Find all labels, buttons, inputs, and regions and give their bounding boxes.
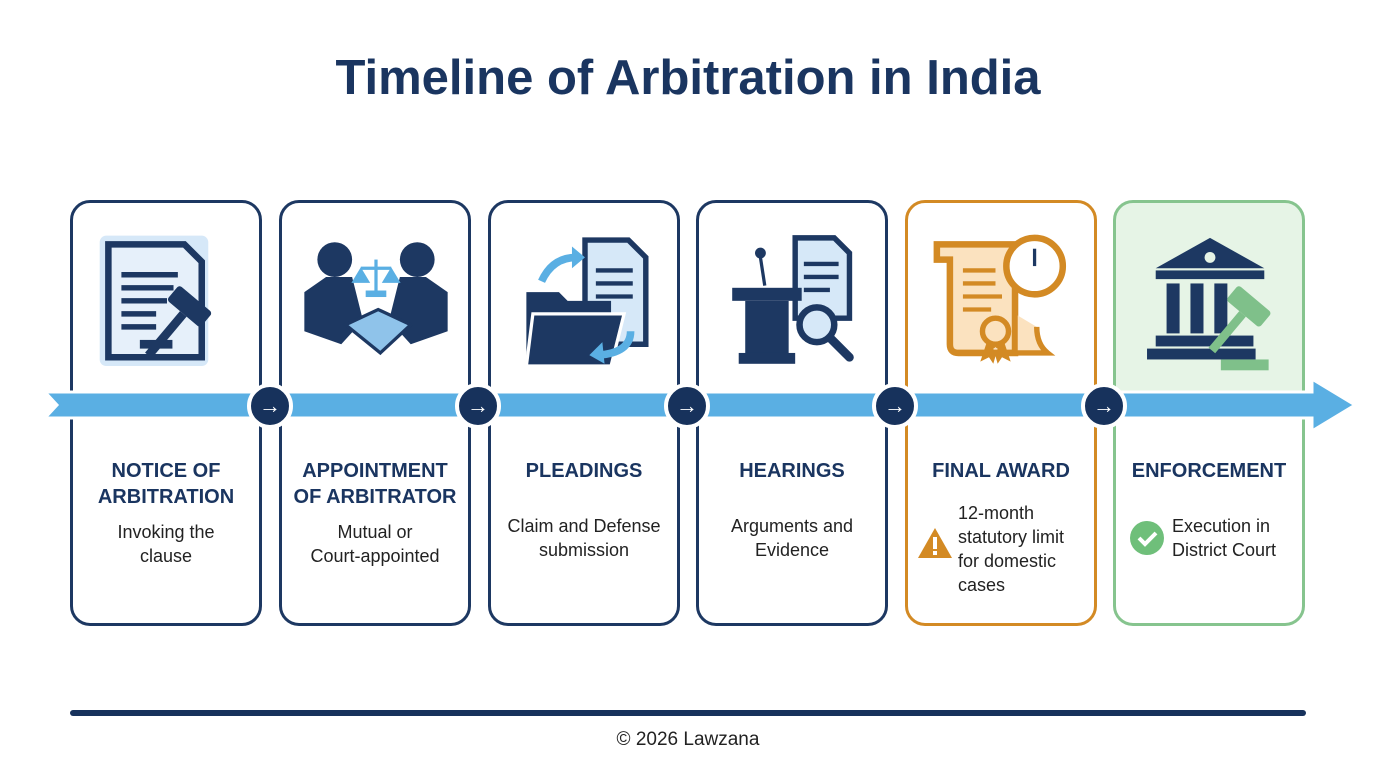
description: clause (140, 546, 192, 566)
description (507, 516, 661, 560)
description: Mutual or (337, 522, 413, 542)
description (958, 503, 1064, 595)
description: Invoking the (117, 522, 215, 542)
heading: NOTICE OF (112, 460, 220, 482)
timeline arrow (48, 382, 1352, 428)
title: Timeline of Arbitration in India (335, 51, 1041, 105)
description: for domestic (958, 551, 1056, 571)
icon: scroll, clock, ribbon (934, 234, 1066, 364)
heading: HEARINGS (739, 460, 845, 482)
heading: OF ARBITRATOR (294, 486, 456, 508)
description (117, 522, 215, 566)
description: Claim and Defense (507, 516, 661, 536)
description: District Court (1172, 540, 1276, 560)
heading: ENFORCEMENT (1132, 460, 1286, 482)
description: Court-appointed (310, 546, 440, 566)
icon: handshake with scales (304, 242, 448, 356)
icon: podium with magnifier (732, 235, 854, 364)
text: → (1093, 393, 1115, 418)
icon: document with gavel (100, 236, 212, 366)
card: notice of arbitration (70, 200, 262, 626)
description (310, 522, 440, 566)
heading: PLEADINGS (526, 460, 642, 482)
text: → (676, 393, 698, 418)
text: → (884, 393, 906, 418)
footer: © 2026 Lawzana (617, 729, 759, 750)
description: Execution in (1172, 516, 1270, 536)
description: cases (958, 575, 1005, 595)
heading (294, 460, 456, 508)
description (731, 516, 853, 560)
icon: courthouse with gavel (1147, 238, 1270, 370)
step arrows (247, 383, 293, 429)
text: → (467, 393, 489, 418)
description: statutory limit (958, 527, 1064, 547)
heading: ARBITRATION (98, 486, 234, 508)
step arrows: → (259, 393, 281, 418)
description (1172, 516, 1276, 560)
description: Arguments and (731, 516, 853, 536)
heading (98, 460, 234, 508)
card: appointment (279, 200, 471, 626)
card: pleadings (488, 200, 680, 626)
description: Evidence (755, 540, 829, 560)
footer rule (70, 710, 1306, 716)
card: hearings (696, 200, 888, 626)
description: 12-month (958, 503, 1034, 523)
icon: check (1130, 521, 1164, 555)
heading: APPOINTMENT (302, 460, 448, 482)
icon: folder and documents (526, 237, 648, 364)
card: final award (905, 200, 1097, 626)
icon: warning (918, 528, 952, 558)
description: submission (539, 540, 629, 560)
card: enforcement (1113, 200, 1305, 626)
heading: FINAL AWARD (932, 460, 1070, 482)
